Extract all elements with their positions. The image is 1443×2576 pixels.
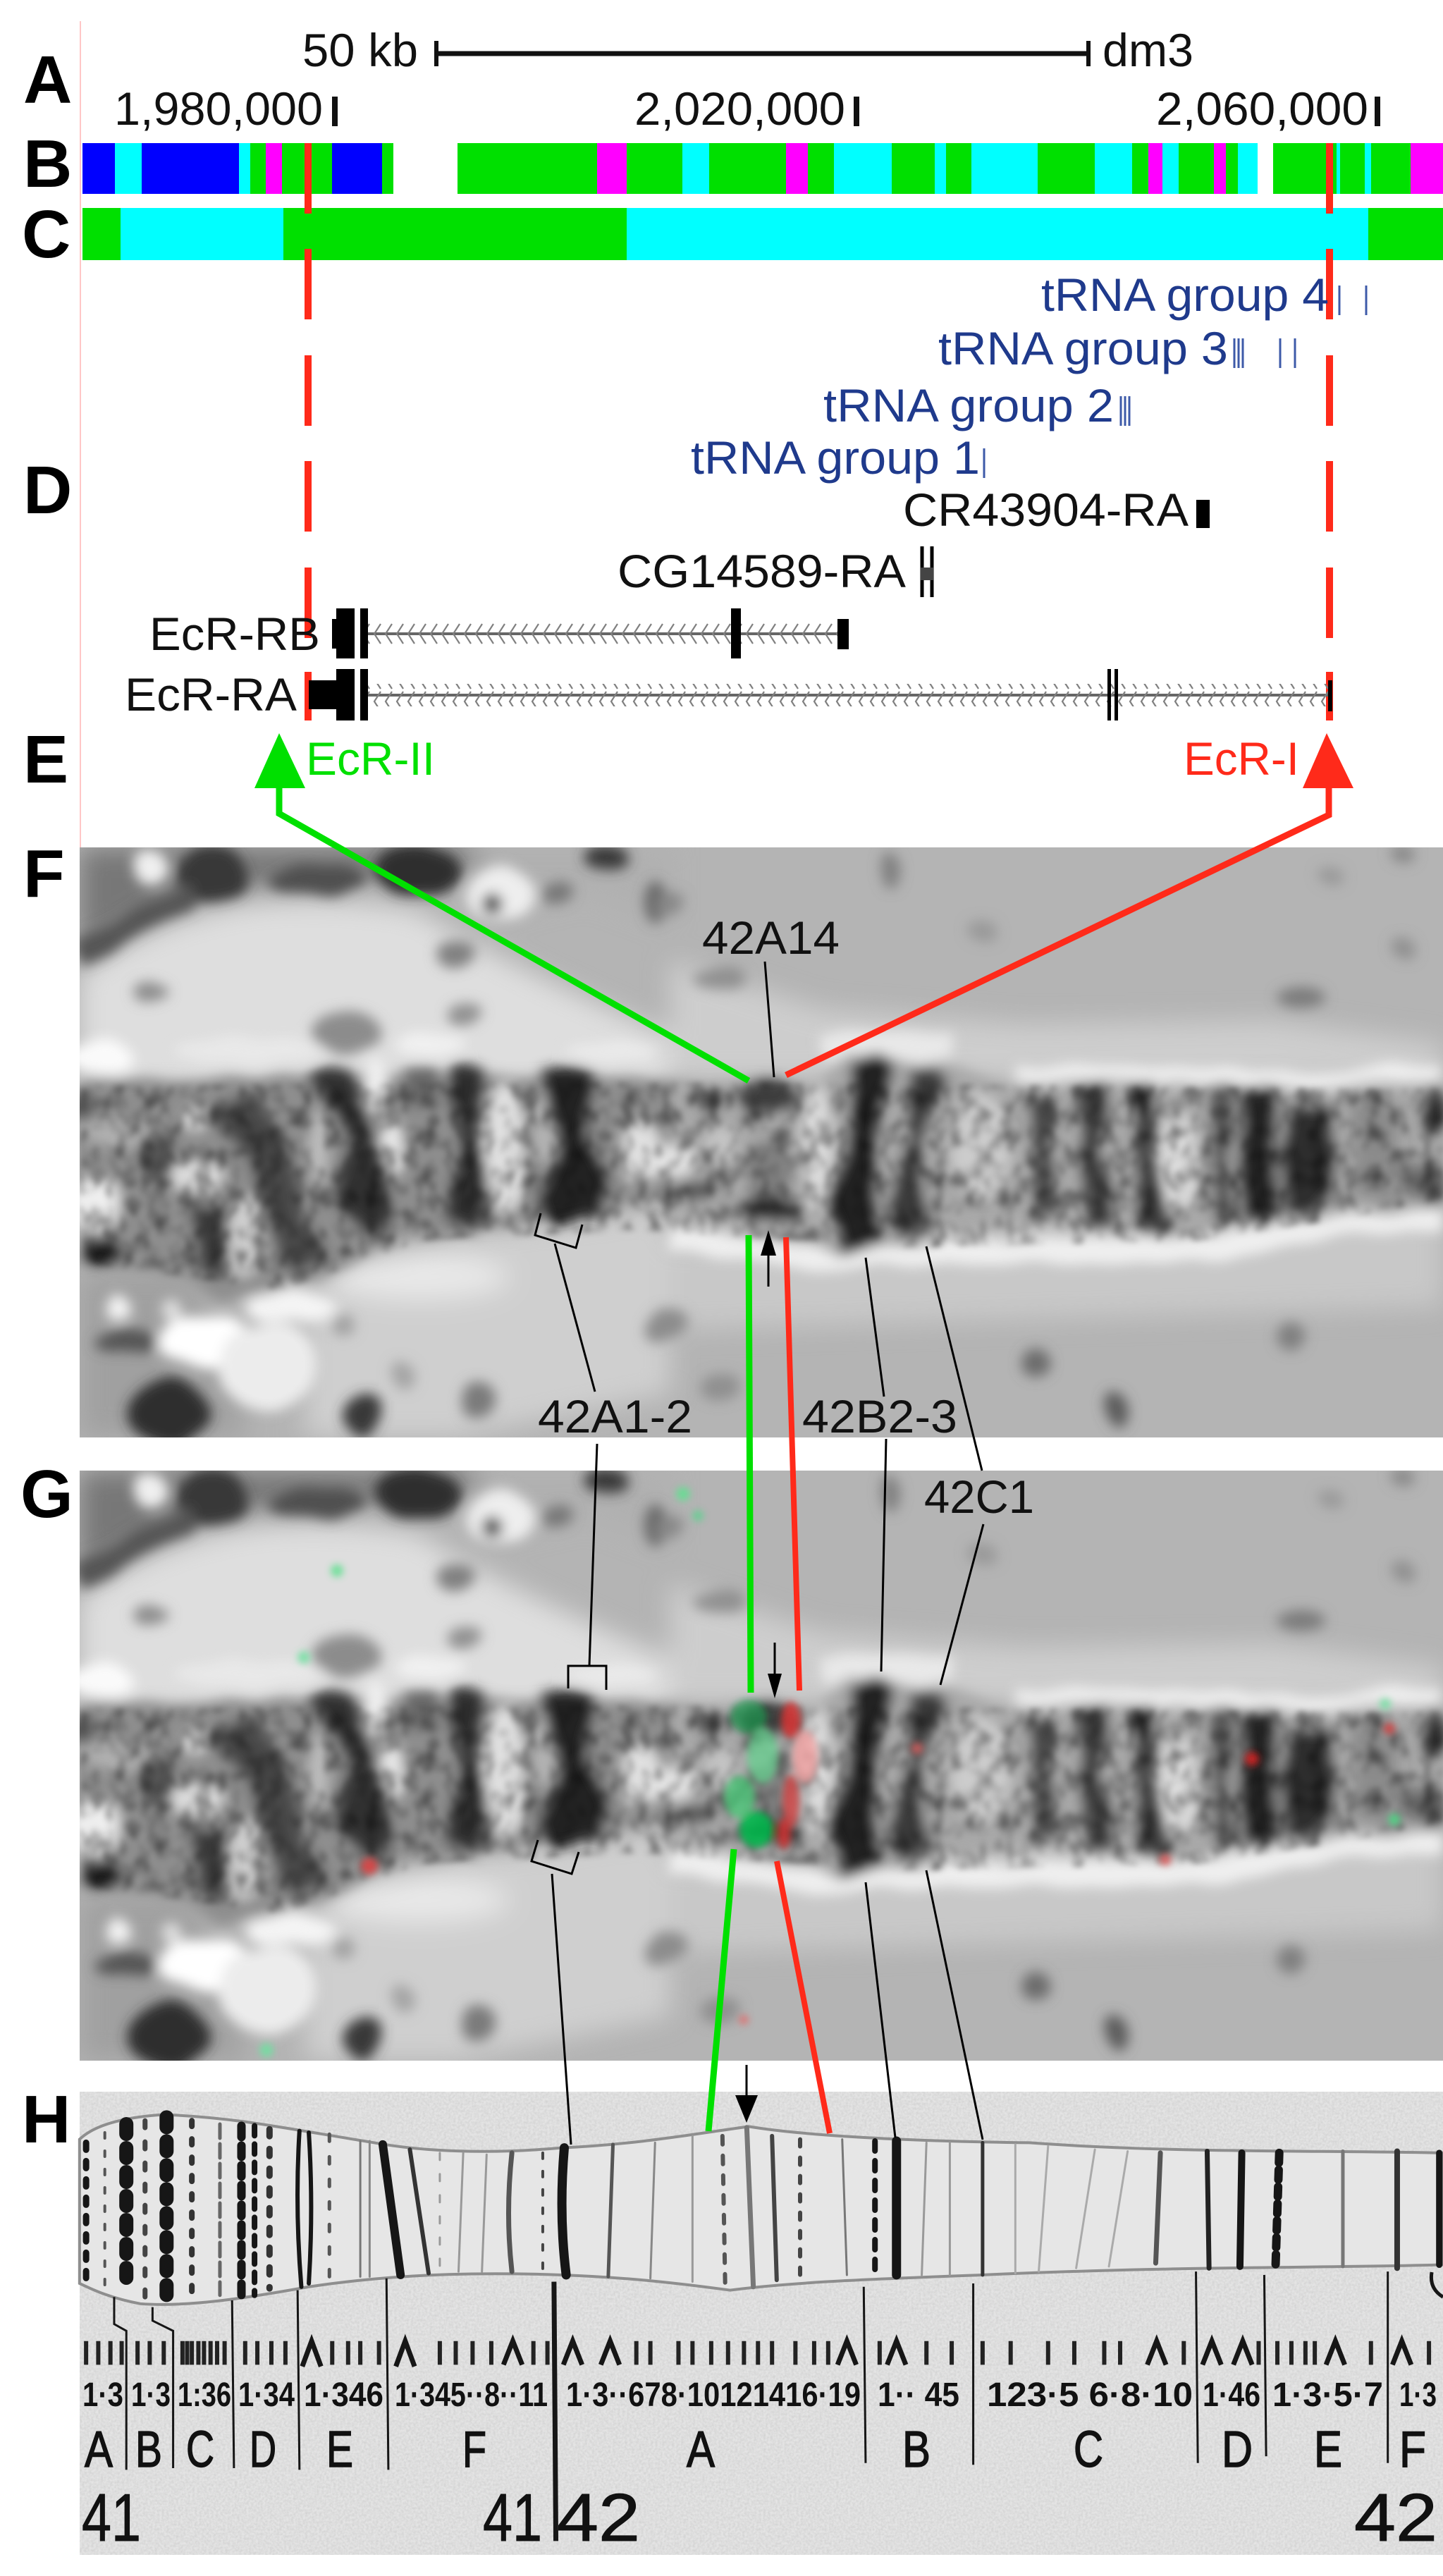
band track C: chromatin domains	[82, 208, 1443, 260]
coordinate ruler	[114, 82, 1380, 135]
tRNA gene groups: tRNA group 3	[938, 322, 1228, 374]
tRNA gene groups: tRNA group 1	[691, 431, 980, 484]
panel: genome browser background	[80, 21, 81, 909]
band numbers: 1·34	[238, 2376, 295, 2414]
division numbers: 41	[82, 2480, 141, 2556]
coordinate ruler: 2,020,000	[634, 82, 845, 135]
coordinate ruler: 1,980,000	[114, 82, 323, 135]
panel label H: H	[22, 2082, 70, 2157]
tRNA gene groups: tRNA group 2	[823, 379, 1114, 431]
panel label A: A	[23, 42, 72, 118]
division numbers: 42	[1354, 2480, 1437, 2556]
label EcR-I: EcR-I	[1184, 732, 1299, 785]
red dashed guide lines	[305, 143, 1333, 720]
arrow: F locus pointer	[761, 1230, 776, 1287]
scale bar: 50 kb dm3	[302, 24, 1193, 76]
tRNA gene groups: tRNA group 4	[1041, 269, 1329, 321]
panel label E: E	[23, 722, 68, 797]
subdivision letters: C	[1074, 2422, 1103, 2478]
label EcR-II: EcR-II	[306, 732, 435, 785]
panel label D: D	[23, 453, 72, 528]
section dividers	[114, 2271, 1443, 2541]
subdivision letters: B	[902, 2422, 931, 2478]
subdivision letters: E	[1314, 2422, 1342, 2478]
tick marks	[86, 2341, 1429, 2365]
photo F: phase-contrast chromosome	[68, 844, 1443, 1444]
label 42A14: 42A14	[702, 912, 840, 964]
panel label C: C	[22, 197, 70, 272]
chromosome outline	[80, 2115, 1443, 2305]
chromosome bands	[86, 2117, 1439, 2304]
coordinate ruler: 2,060,000	[1156, 82, 1368, 135]
label 42C1: 42C1	[924, 1471, 1034, 1523]
band numbers: 1·46	[1203, 2376, 1260, 2414]
scale bar: 50 kb dm3: dm3	[1103, 24, 1193, 76]
subdivision letters: A	[687, 2422, 715, 2478]
subdivision letters: E	[326, 2422, 353, 2478]
band numbers: 1:36	[178, 2376, 231, 2414]
band numbers: 1·· 45	[878, 2376, 959, 2414]
arrow: G locus pointer	[768, 1643, 782, 1698]
band numbers: 1·346	[304, 2376, 383, 2414]
red EcR-I connector and arrowhead	[777, 733, 1353, 2133]
subdivision letters: A	[85, 2422, 113, 2478]
band numbers	[82, 2376, 1437, 2414]
band numbers: 1·3	[82, 2376, 123, 2414]
gene EcR-RA: EcR-RA	[125, 668, 297, 720]
division numbers: 41	[483, 2480, 542, 2556]
gene EcR-RB	[149, 608, 849, 660]
gene EcR-RB: EcR-RB	[149, 608, 320, 660]
subdivision letters: D	[1222, 2422, 1253, 2478]
band numbers: 1·3	[131, 2376, 171, 2414]
subdivision letters	[85, 2422, 1426, 2478]
division numbers	[82, 2480, 1437, 2556]
panel label G: G	[20, 1456, 73, 1532]
subdivision letters: F	[462, 2422, 486, 2478]
subdivision letters: F	[1399, 2422, 1426, 2478]
gene CG14589-RA: CG14589-RA	[618, 545, 906, 597]
band numbers: 1·3··678·10121416·19	[566, 2376, 861, 2414]
label 42B2-3: 42B2-3	[802, 1390, 957, 1442]
photo G: fluorescence merged chromosome	[68, 1467, 1443, 2067]
gene CR43904-RA: CR43904-RA	[903, 484, 1189, 536]
label 42A1-2: 42A1-2	[538, 1390, 692, 1442]
band numbers: 1·3·5·7	[1272, 2376, 1383, 2414]
tRNA gene groups	[691, 269, 1366, 484]
green EcR-II connector and arrowhead	[254, 733, 751, 2131]
gene EcR-RA	[125, 668, 1332, 720]
scale bar: 50 kb dm3: 50 kb	[302, 24, 418, 76]
panel label F: F	[23, 836, 65, 912]
band numbers: 123·5 6·8·10	[987, 2376, 1193, 2414]
subdivision letters: C	[186, 2422, 214, 2478]
black leader lines	[532, 962, 983, 2145]
band numbers: 1·345··8··11	[395, 2376, 548, 2414]
panel label B: B	[23, 126, 72, 202]
subdivision letters: D	[250, 2422, 276, 2478]
division numbers: 42	[557, 2480, 640, 2556]
band track B: chromatin states	[82, 143, 1443, 194]
arrow: H locus pointer	[735, 2065, 758, 2123]
subdivision letters: B	[135, 2422, 162, 2478]
panel H: polytene chromosome map drawing	[80, 2092, 1443, 2556]
